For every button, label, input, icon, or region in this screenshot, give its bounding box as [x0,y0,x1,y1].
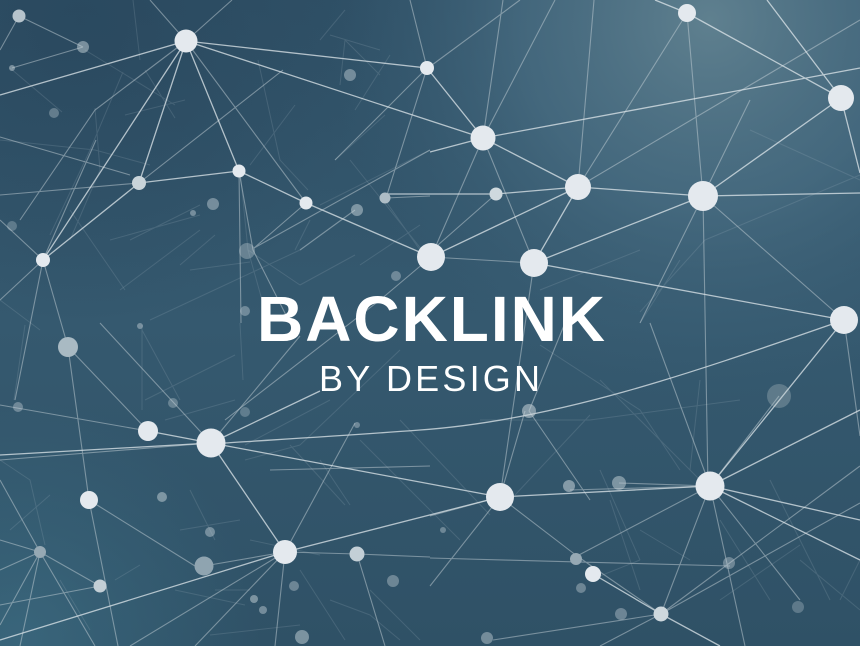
subtitle: BY DESIGN: BY DESIGN [319,358,540,399]
title: BACKLINK: BACKLINK [257,283,605,355]
large hub nodes [174,30,858,564]
small nodes [12,4,696,622]
